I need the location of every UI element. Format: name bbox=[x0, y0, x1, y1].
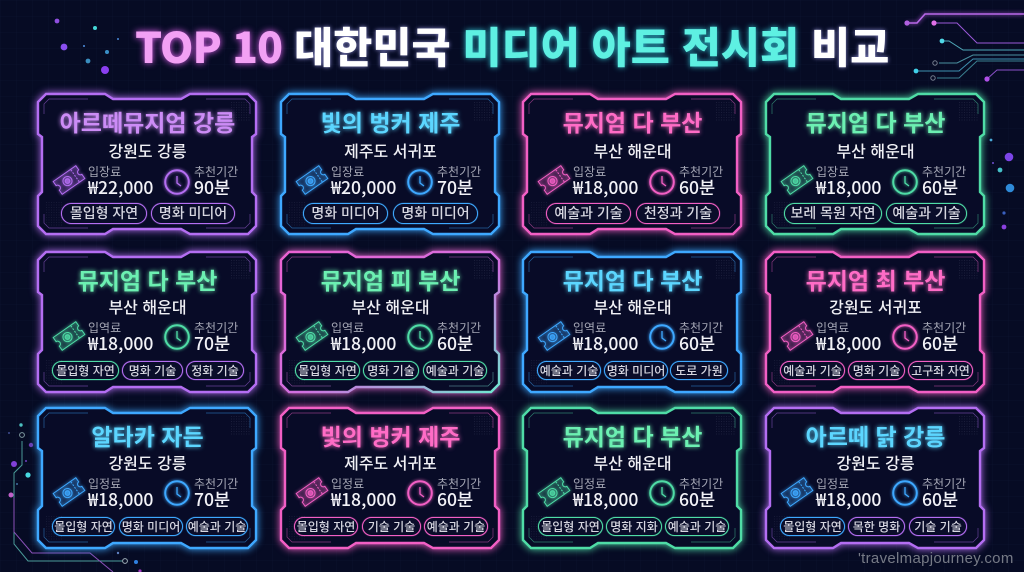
panel frame bbox=[758, 244, 992, 400]
tag: 예술과 기술 bbox=[426, 362, 484, 379]
time value: 60분 bbox=[922, 487, 958, 512]
icon: clock bbox=[890, 166, 920, 198]
exhibition name: 뮤지엄 최 부산 bbox=[806, 262, 945, 296]
admission value: ₩18,000 bbox=[88, 487, 153, 512]
panel: 빛의 벙커 제주 bbox=[274, 86, 506, 242]
tag: 몰입형 자연 bbox=[56, 362, 115, 379]
icon: clock bbox=[407, 480, 433, 506]
tag: 명화 미디어 bbox=[311, 203, 380, 223]
icon: ticket bbox=[51, 320, 87, 352]
icon: clock bbox=[649, 480, 675, 506]
tag: 몰입형 자연 bbox=[70, 203, 138, 223]
title bbox=[131, 15, 891, 76]
admission fee: 입역료 bbox=[816, 319, 849, 336]
tag: 기술 기술 bbox=[914, 518, 962, 535]
decoration: top-left particle dots bbox=[54, 18, 119, 74]
location: 강원도 서귀포 bbox=[829, 294, 922, 318]
icon: clock bbox=[646, 322, 678, 352]
panel frame bbox=[30, 244, 264, 400]
tag: 예술과 기술 bbox=[427, 518, 485, 535]
tag: 명화 미디어 bbox=[607, 362, 665, 379]
icon: ticket bbox=[51, 164, 87, 196]
panel: 뮤지엄 최 부산 bbox=[758, 244, 992, 400]
tag: 명화 미디어 bbox=[122, 518, 180, 535]
exhibition name: 뮤지엄 다 부산 bbox=[806, 104, 945, 138]
location: 강원도 강릉 bbox=[836, 450, 915, 474]
location: 제주도 서귀포 bbox=[344, 450, 437, 474]
admission fee: 입정료 bbox=[816, 475, 849, 492]
location: 제주도 서귀포 bbox=[344, 138, 437, 162]
time value: 70분 bbox=[194, 487, 230, 512]
exhibition name: 뮤지엄 다 부산 bbox=[78, 262, 217, 296]
admission fee: 입장료 bbox=[573, 163, 606, 180]
admission value: ₩20,000 bbox=[331, 175, 396, 200]
icon: ticket bbox=[538, 476, 570, 508]
exhibition name: 뮤지엄 다 부산 bbox=[563, 262, 702, 296]
admission value: ₩18,000 bbox=[816, 175, 881, 200]
time value: 60분 bbox=[922, 175, 958, 200]
panel frame bbox=[516, 86, 748, 242]
icon: clock bbox=[404, 166, 436, 198]
panel: 빛의 벙커 제주 (pink) bbox=[281, 408, 500, 549]
time value: 90분 bbox=[194, 175, 230, 200]
time value: 60분 bbox=[437, 331, 473, 356]
admission fee: 입장료 bbox=[816, 163, 849, 180]
decoration: bottom-left circuit lines bbox=[8, 423, 142, 572]
exhibition name: 뮤지엄 다 부산 bbox=[563, 104, 702, 138]
icon: clock bbox=[890, 322, 920, 352]
recommended time: 추천기간 bbox=[922, 319, 966, 336]
location: 부산 해운대 bbox=[108, 294, 187, 318]
panel: 아르떼 닭 강릉 bbox=[766, 408, 985, 549]
admission fee: 입역료 bbox=[88, 319, 121, 336]
title: 미디어 아트 전시회 bbox=[462, 15, 799, 76]
icon: ticket bbox=[296, 476, 328, 508]
tag: 고구좌 자연 bbox=[911, 362, 970, 379]
recommended time: 추천기간 bbox=[679, 475, 723, 492]
tag: 몰입형 자연 bbox=[783, 518, 842, 535]
location: 강원도 강릉 bbox=[108, 450, 187, 474]
recommended time: 추천기간 bbox=[922, 163, 966, 180]
time value: 60분 bbox=[922, 331, 958, 356]
recommended time: 추천기간 bbox=[922, 475, 966, 492]
admission fee: 입정료 bbox=[88, 475, 121, 492]
exhibition name: 아르떼 닭 강릉 bbox=[806, 418, 945, 452]
time value: 60분 bbox=[679, 331, 715, 356]
time value: 70분 bbox=[437, 175, 473, 200]
admission value: ₩22,000 bbox=[88, 175, 153, 200]
location: 부산 해운대 bbox=[836, 138, 915, 162]
icon: ticket bbox=[294, 163, 330, 197]
exhibition name: 빛의 벙커 제주 bbox=[321, 418, 460, 452]
tag: 명화 지화 bbox=[610, 518, 658, 535]
tag: 명화 기술 bbox=[367, 362, 415, 379]
exhibition name: 뮤지엄 피 부산 bbox=[321, 262, 460, 296]
tag: 예술과 기술 bbox=[783, 362, 842, 379]
panel: 뮤지엄 다 부산 (purple frame) bbox=[30, 244, 264, 400]
tag: 명화 기술 bbox=[853, 362, 900, 379]
panel: 뮤지엄 피 부산 bbox=[274, 244, 506, 400]
icon: ticket bbox=[781, 476, 813, 508]
admission fee: 입장료 bbox=[331, 163, 364, 180]
tag: 기술 기술 bbox=[368, 518, 415, 535]
title: 대한민국 bbox=[294, 15, 451, 76]
recommended time: 추천기간 bbox=[437, 475, 481, 492]
panel frame bbox=[766, 408, 985, 549]
icon: ticket bbox=[50, 475, 88, 509]
admission value: ₩18,000 bbox=[331, 487, 396, 512]
location: 부산 해운대 bbox=[593, 294, 672, 318]
exhibition name: 알타카 자든 bbox=[91, 418, 204, 452]
recommended time: 추천기간 bbox=[194, 163, 238, 180]
tag: 천정과 기술 bbox=[644, 203, 712, 223]
icon: ticket bbox=[536, 163, 572, 197]
tag: 명화 미디어 bbox=[159, 203, 227, 223]
tag: 몰입형 자연 bbox=[298, 362, 357, 379]
tag: 명화 미디어 bbox=[401, 203, 470, 223]
panel: 뮤지엄 다 부산 (green, lower) bbox=[523, 408, 742, 549]
admission fee: 입역료 bbox=[331, 319, 364, 336]
icon: clock bbox=[162, 322, 192, 352]
admission value: ₩18,000 bbox=[331, 331, 396, 356]
location: 강원도 강릉 bbox=[108, 138, 187, 162]
time value: 60분 bbox=[437, 487, 473, 512]
tag: 몰입형 자연 bbox=[541, 518, 600, 535]
tag: 몰입형 자연 bbox=[54, 518, 113, 535]
icon: clock bbox=[404, 322, 436, 352]
tag bbox=[122, 361, 183, 380]
time value: 70분 bbox=[194, 331, 230, 356]
admission fee: 입정료 bbox=[331, 475, 364, 492]
location: 부산 해운대 bbox=[593, 450, 672, 474]
tag: 목한 명화 bbox=[853, 518, 900, 535]
panel frame bbox=[30, 400, 264, 556]
tag: 정화 기술 bbox=[191, 362, 239, 379]
tag: 예술과 기술 bbox=[540, 362, 598, 379]
recommended time: 추천기간 bbox=[194, 319, 238, 336]
icon: clock bbox=[646, 166, 678, 198]
panel: 뮤지엄 다 부산 (green) bbox=[758, 86, 992, 242]
tag: 예술과 기술 bbox=[554, 203, 623, 223]
admission value: ₩18,000 bbox=[573, 487, 638, 512]
time value: 60분 bbox=[679, 175, 715, 200]
tag: 명화 기술 bbox=[129, 362, 176, 379]
icon: ticket bbox=[779, 164, 815, 196]
location: 부산 해운대 bbox=[351, 294, 430, 318]
location: 부산 해운대 bbox=[593, 138, 672, 162]
recommended time: 추천기간 bbox=[437, 163, 481, 180]
panel frame bbox=[274, 244, 506, 400]
admission value: ₩18,000 bbox=[816, 487, 881, 512]
panel frame bbox=[30, 86, 264, 242]
panel: 알타카 자든 bbox=[30, 400, 264, 556]
recommended time: 추천기간 bbox=[679, 319, 723, 336]
icon: clock bbox=[164, 480, 190, 506]
recommended time: 추천기간 bbox=[437, 319, 481, 336]
admission fee: 입역료 bbox=[573, 319, 606, 336]
panel frame bbox=[274, 86, 506, 242]
admission value: ₩18,000 bbox=[816, 331, 881, 356]
exhibition name: 뮤지엄 다 부산 bbox=[563, 418, 702, 452]
panel frame bbox=[523, 408, 742, 549]
exhibition name: 아르떼뮤지엄 강릉 bbox=[60, 104, 235, 138]
icon: ticket bbox=[536, 319, 572, 353]
admission value: ₩18,000 bbox=[88, 331, 153, 356]
panel frame bbox=[516, 244, 748, 400]
panel frame bbox=[281, 408, 500, 549]
decoration: top-right circuit lines bbox=[904, 10, 1024, 82]
tag: 몰입형 자연 bbox=[297, 518, 355, 535]
title: TOP 10 bbox=[135, 15, 282, 76]
tag: 예술과 기술 bbox=[668, 518, 726, 535]
panel frame bbox=[758, 86, 992, 242]
admission value: ₩18,000 bbox=[573, 331, 638, 356]
tag: 도로 가원 bbox=[675, 362, 723, 379]
panel: 뮤지엄 다 부산 (blue) bbox=[516, 244, 748, 400]
icon: clock bbox=[162, 166, 192, 198]
panel: 아르떼뮤지엄 강릉 bbox=[30, 86, 264, 242]
icon: ticket bbox=[294, 320, 330, 352]
recommended time: 추천기간 bbox=[679, 163, 723, 180]
icon: ticket bbox=[778, 319, 816, 353]
panel: 뮤지엄 다 부산 (pink) bbox=[516, 86, 748, 242]
icon: clock bbox=[892, 480, 918, 506]
exhibition name: 빛의 벙커 제주 bbox=[321, 104, 460, 138]
admission value: ₩18,000 bbox=[573, 175, 638, 200]
title: 비교 bbox=[811, 15, 889, 76]
admission fee: 입정료 bbox=[573, 475, 606, 492]
recommended time: 추천기간 bbox=[194, 475, 238, 492]
watermark: 'travelmapjourney.com bbox=[858, 550, 1014, 567]
decoration: right side particle dots bbox=[990, 138, 1014, 230]
tag: 보레 목원 자연 bbox=[790, 203, 876, 223]
admission fee: 입장료 bbox=[88, 163, 121, 180]
time value: 60분 bbox=[679, 487, 715, 512]
tag: 예술과 기술 bbox=[188, 518, 246, 535]
tag: 예술과 기술 bbox=[892, 203, 961, 223]
